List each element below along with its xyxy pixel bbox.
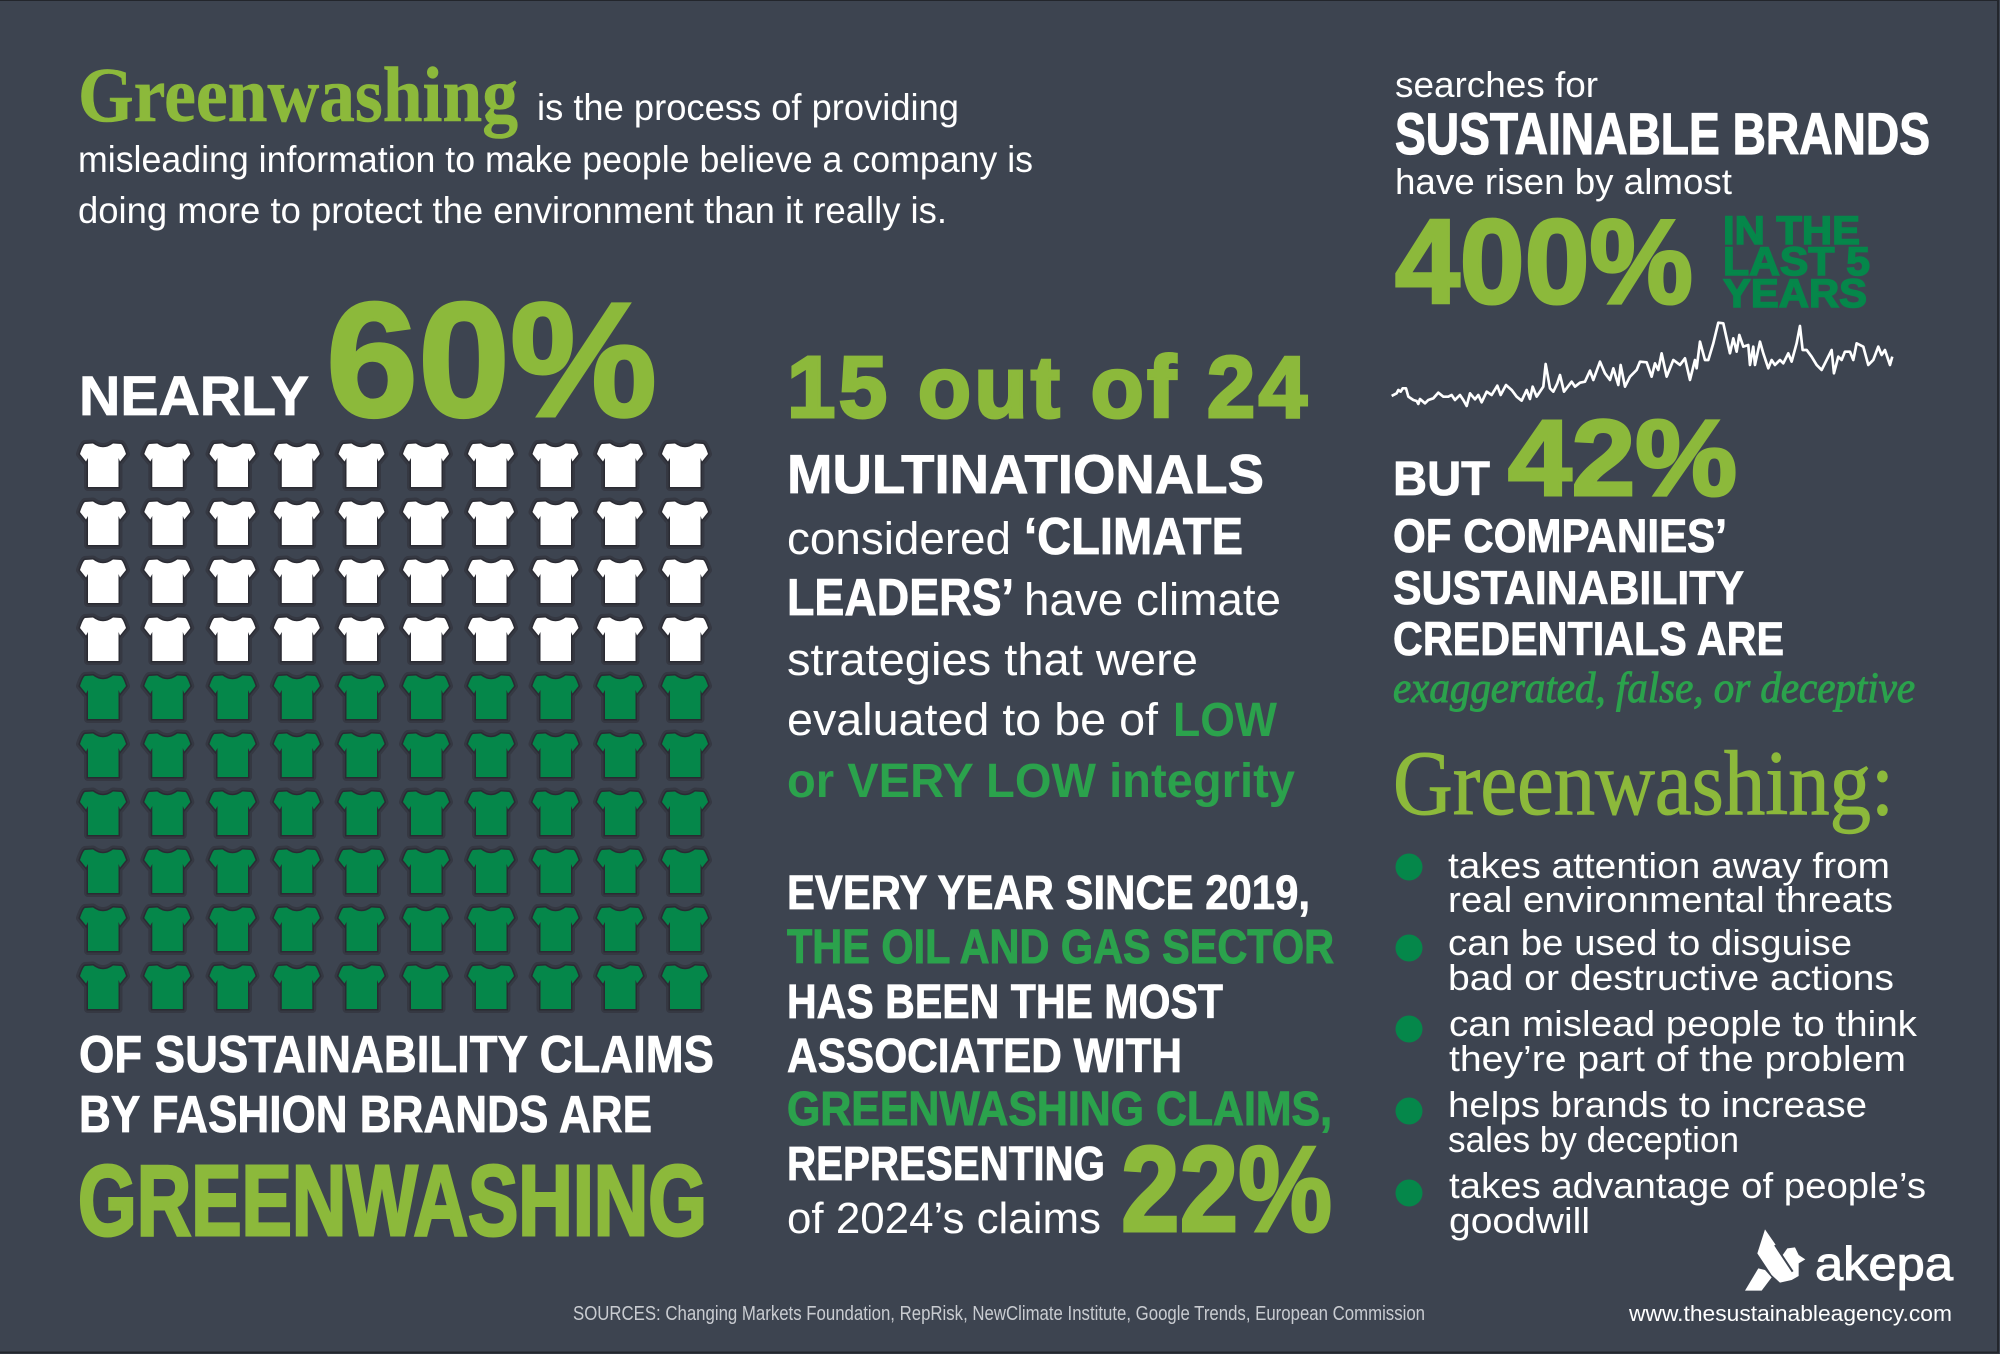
logo: akepa: [1745, 1229, 1954, 1291]
list item 1: [1396, 845, 1893, 920]
panel: 15 out of 24: [787, 339, 1307, 808]
heading: nearly 60%: 60%: [326, 268, 657, 451]
list item 3: can mislead people to think: [1449, 1003, 1918, 1044]
icon: bird: [1745, 1229, 1805, 1291]
text block: oil and gas: HAS BEEN THE MOST: [787, 976, 1223, 1029]
stat: 400%: 400%: [1395, 195, 1693, 329]
text block: multinationals: have climate: [1024, 574, 1281, 625]
text: in the last 5 years: IN THE: [1723, 209, 1860, 253]
text block: oil and gas: of 2024’s claims: [787, 1194, 1101, 1243]
list item 5: takes advantage of people’s: [1449, 1165, 1926, 1206]
intro text block: misleading information to make people believe a company is: [78, 139, 1033, 180]
text block: oil and gas: ASSOCIATED WITH: [787, 1030, 1182, 1083]
text block: oil and gas: GREENWASHING CLAIMS,: [787, 1083, 1332, 1136]
text: credentials: exaggerated, false, or deceptive: [1393, 665, 1915, 712]
logo: akepa: akepa: [1815, 1237, 1954, 1290]
panel: greenwashing list: [1393, 732, 1926, 1241]
website url: www.thesustainableagency.com: [1628, 1301, 1952, 1326]
panel: oil and gas sector: [787, 867, 1334, 1257]
text: credentials: OF COMPANIES’: [1393, 509, 1727, 562]
text: in the last 5 years: YEARS: [1723, 272, 1867, 316]
list item 3: [1396, 1003, 1918, 1079]
heading: but 42%: [1393, 397, 1737, 518]
text: searches: have risen by almost: [1395, 161, 1732, 202]
text block: oil and gas: EVERY YEAR SINCE 2019,: [787, 867, 1310, 920]
heading: Greenwashing:: Greenwashing:: [1393, 732, 1894, 834]
list item 1: takes attention away from: [1448, 845, 1890, 886]
intro text block: [78, 51, 1033, 231]
text: claims by fashion brands: BY FASHION BRANDS ARE: [79, 1086, 652, 1144]
heading: nearly 60%: [79, 268, 657, 451]
list item 5: [1396, 1165, 1926, 1241]
text block: multinationals: MULTINATIONALS: [787, 443, 1264, 505]
text: in the last 5 years: LAST 5: [1723, 240, 1870, 284]
title: Greenwashing: Greenwashing: [78, 51, 518, 138]
heading: but 42%: 42%: [1508, 397, 1737, 518]
list item 2: [1396, 922, 1894, 998]
text: credentials: [1393, 509, 1915, 712]
text: searches: searches for: [1395, 64, 1598, 105]
text: claims by fashion brands: [79, 1026, 714, 1144]
intro text block: doing more to protect the environment than it really is.: [78, 190, 947, 231]
text block: multinationals: evaluated to be of: [787, 694, 1159, 745]
list item 4: sales by deception: [1448, 1119, 1739, 1160]
text block: oil and gas: REPRESENTING: [787, 1138, 1105, 1191]
text: credentials: SUSTAINABILITY: [1393, 561, 1744, 614]
list item 1: real environmental threats: [1448, 879, 1893, 920]
list item 2: can be used to disguise: [1448, 922, 1852, 963]
icon: green shirts: [80, 676, 708, 1009]
text block: multinationals: LOW: [1173, 694, 1278, 747]
chart: search trend line: [1392, 323, 1892, 406]
text block: multinationals: LEADERS’: [787, 569, 1014, 627]
text block: multinationals: [787, 443, 1295, 808]
text: in the last 5 years: [1723, 209, 1870, 316]
text: credentials: CREDENTIALS ARE: [1393, 612, 1784, 665]
sources: SOURCES: Changing Markets Foundation, RepRisk, NewClimate Institute, Google Trends, European Commission: [573, 1303, 1425, 1325]
panel: but 42%: [1393, 397, 1915, 712]
list item 5: goodwill: [1449, 1200, 1590, 1241]
stat: 22%: 22%: [1121, 1121, 1332, 1257]
text block: multinationals: considered: [787, 513, 1011, 564]
text: GREENWASHING: GREENWASHING: [78, 1145, 707, 1257]
list item 4: [1396, 1084, 1867, 1160]
panel: nearly 60%: [78, 268, 714, 1257]
text block: multinationals: strategies that were: [787, 634, 1198, 685]
heading: nearly 60%: NEARLY: [79, 364, 309, 427]
text: searches: [1395, 64, 1930, 202]
list item 4: helps brands to increase: [1448, 1084, 1867, 1125]
text block: multinationals: ‘CLIMATE: [1024, 508, 1243, 566]
list item 2: bad or destructive actions: [1448, 957, 1894, 998]
heading: 15 out of 24: 15 out of 24: [787, 339, 1307, 436]
panel: searches for sustainable brands: [1392, 64, 1930, 406]
list item 3: they’re part of the problem: [1449, 1038, 1906, 1079]
heading: but 42%: BUT: [1393, 453, 1490, 506]
text block: oil and gas: [787, 867, 1334, 1243]
icon: white shirts: [80, 444, 708, 661]
intro text block: is the process of providing: [537, 87, 959, 128]
text block: oil and gas: THE OIL AND GAS SECTOR: [787, 921, 1334, 974]
text block: multinationals: or VERY LOW integrity: [787, 755, 1295, 808]
text: claims by fashion brands: OF SUSTAINABILITY CLAIMS: [79, 1026, 714, 1084]
